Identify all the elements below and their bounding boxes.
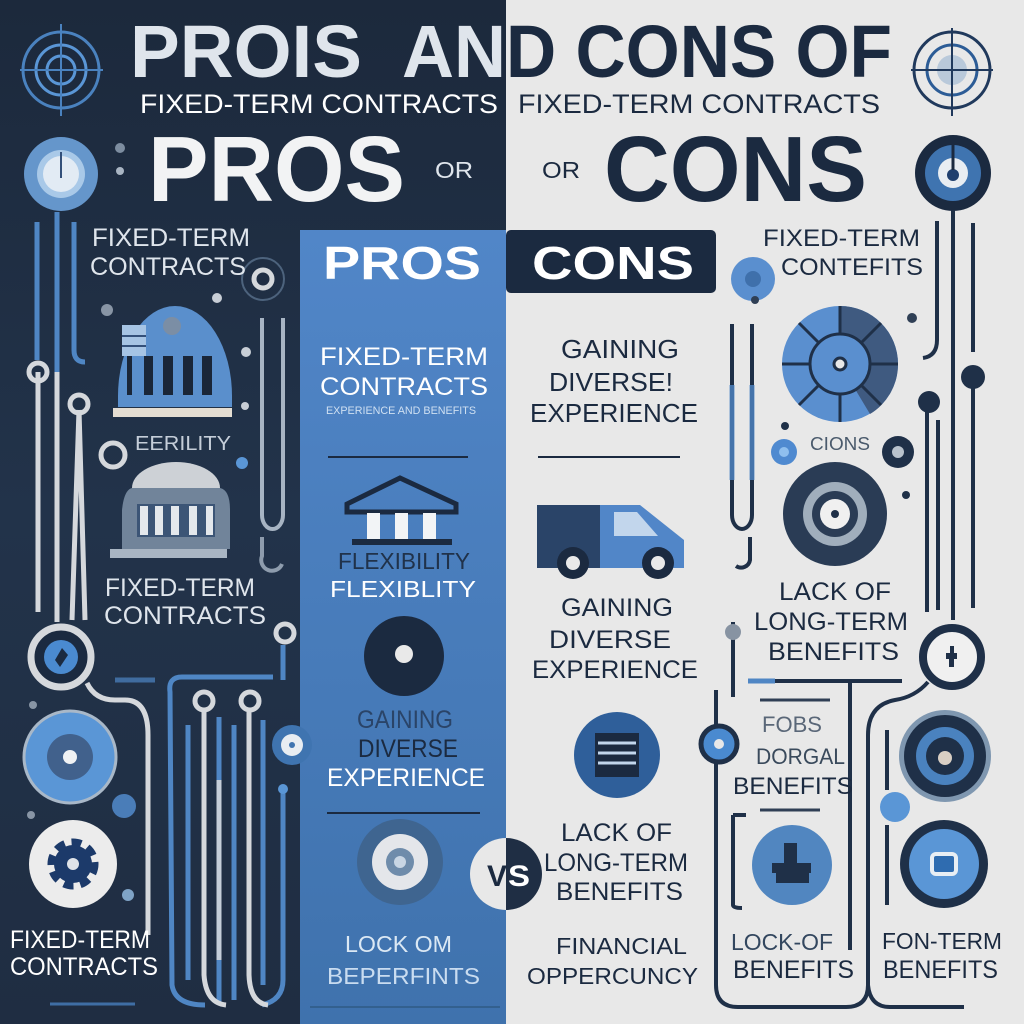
icon: right top circle	[915, 135, 991, 211]
text: gaining diverse experience two: EXPERIENCE	[532, 656, 698, 684]
text: cons: CIONS	[810, 434, 870, 454]
lower left circuit lines	[27, 645, 288, 1005]
text: gaining diverse experience cons: EXPERIENCE	[530, 398, 698, 428]
text: fixed-term contracts: FIXED-TERM	[92, 224, 250, 252]
text: gaining diverse experience: DIVERSE	[358, 735, 458, 763]
subtitle left: FIXED-TERM CONTRACTS	[140, 89, 498, 119]
text: fon-term benefits: FON-TERM	[882, 928, 1002, 954]
text: fixed-term contracts	[90, 224, 250, 281]
title: D CONS OF	[506, 10, 892, 93]
text: roles legal benefits: DORGAL	[756, 744, 845, 769]
banner: pros: PROS	[323, 237, 481, 289]
text: fixed-term contefits: CONTEFITS	[781, 254, 923, 281]
text: gaining diverse experience two: DIVERSE	[549, 626, 671, 654]
text: flexibility: EERILITY	[135, 433, 231, 455]
text: pros column heading: FIXED-TERM	[320, 343, 488, 371]
text: lack of long-term benefits two: LACK OF	[779, 578, 891, 606]
text: pros column heading	[320, 343, 488, 417]
text: lack of long-term benefits	[544, 819, 688, 906]
left connector lines	[29, 143, 294, 642]
heading: pros: PROS	[148, 117, 405, 221]
banner: cons: CONS	[532, 237, 694, 289]
icon: list circle	[574, 712, 660, 798]
text: lack of long-term benefits two	[754, 578, 908, 666]
text: fixed-term contracts three: CONTRACTS	[10, 953, 158, 981]
text: fixed-term contefits	[763, 225, 923, 281]
text: fixed-term contefits: FIXED-TERM	[763, 225, 920, 252]
title: PROIS	[130, 10, 362, 93]
title: AN	[402, 10, 506, 93]
text: lack of long-term benefits: BENEFITS	[556, 878, 683, 906]
text: roles legal benefits: FOBS	[762, 712, 822, 737]
text: financial opportunity: FINANCIAL	[556, 933, 687, 959]
icon: left top circle	[24, 137, 98, 211]
text: fixed-term contracts two: FIXED-TERM	[105, 574, 255, 602]
or right: OR	[542, 157, 580, 183]
text: gaining diverse experience cons	[530, 334, 698, 428]
text: fixed-term contracts three	[10, 926, 158, 981]
text: financial opportunity: OPPERCUNCY	[527, 963, 698, 989]
text: lock-of benefits: LOCK-OF	[731, 929, 833, 955]
icon: gear	[29, 820, 117, 908]
icon: lower right square circle	[900, 820, 988, 908]
text: fixed-term contracts two: CONTRACTS	[104, 602, 266, 630]
text: lack of long-term benefits: LONG-TERM	[544, 849, 688, 877]
text: lock benefits: LOCK OM	[345, 931, 452, 957]
icon: bank building	[113, 306, 232, 417]
divider left	[328, 456, 468, 458]
text: gaining diverse experience: GAINING	[357, 706, 453, 734]
subtitle right: FIXED-TERM CONTRACTS	[518, 89, 880, 119]
text: flexibility: FLEXIBILITY	[338, 548, 470, 574]
icon: right edge small circle	[272, 725, 312, 765]
text: gaining diverse experience	[327, 706, 485, 792]
icon: temple	[347, 478, 456, 545]
text: financial opportunity	[527, 933, 698, 989]
badge: vs	[470, 838, 542, 910]
text: lock benefits: BEPERFINTS	[327, 963, 480, 989]
text: fon-term benefits	[882, 928, 1002, 984]
text: gaining diverse experience: EXPERIENCE	[327, 764, 485, 792]
divider right	[538, 456, 680, 458]
text: lock benefits	[327, 931, 480, 989]
title	[130, 10, 892, 93]
text: gaining diverse experience two: GAINING	[561, 594, 673, 622]
text: roles legal benefits	[733, 712, 853, 800]
icon: lower left node	[31, 627, 91, 687]
text: roles legal benefits: BENEFITS	[733, 773, 853, 800]
text: fixed-term contracts: CONTRACTS	[90, 253, 246, 281]
panel: light right background	[506, 0, 1024, 1024]
icon: lower left circle	[24, 711, 116, 803]
icon: segmented wheel	[782, 306, 898, 422]
text: gaining diverse experience cons: GAINING	[561, 334, 679, 364]
text: fixed-term contracts three: FIXED-TERM	[10, 926, 150, 954]
text: gaining diverse experience two	[532, 594, 698, 684]
text: flexibility: FLEXIBLITY	[330, 576, 476, 602]
text: gaining diverse experience cons: DIVERSE!	[549, 367, 673, 397]
icon: blue cross circle	[752, 825, 832, 905]
text: lack of long-term benefits two: BENEFITS	[768, 638, 899, 666]
badge: vs: V	[487, 860, 507, 893]
icon: dark target	[783, 462, 887, 566]
divider lower left	[327, 812, 480, 814]
text: flexibility	[330, 548, 476, 602]
banner: cons	[506, 230, 716, 293]
panel: dark left background	[0, 0, 506, 1024]
icon: top left target	[20, 24, 103, 116]
lower right frame lines	[701, 622, 964, 1007]
text: lock-of benefits	[731, 929, 854, 984]
text: lack of long-term benefits two: LONG-TERM	[754, 608, 908, 636]
bottom faint line	[310, 1006, 500, 1008]
icon: top right target	[911, 28, 993, 116]
or left: OR	[435, 157, 473, 183]
icon: lower right ring	[899, 710, 991, 802]
text: pros column heading: EXPERIENCE AND BENEFITS	[326, 405, 476, 417]
icon: van	[537, 505, 684, 579]
icon: bank building two	[110, 462, 230, 558]
icon: dark circle	[364, 616, 444, 696]
panel: blue pros column	[300, 230, 506, 1024]
icon: right node	[923, 628, 981, 686]
icon: blue panel target	[357, 819, 443, 905]
heading: cons: CONS	[604, 117, 867, 221]
text: lock-of benefits: BENEFITS	[733, 956, 854, 984]
badge: vs: S	[508, 860, 530, 893]
text: lack of long-term benefits: LACK OF	[561, 819, 672, 847]
text: fixed-term contracts two	[104, 574, 266, 630]
text: fon-term benefits: BENEFITS	[883, 956, 998, 984]
text: pros column heading: CONTRACTS	[320, 373, 488, 401]
right connector lines	[731, 210, 985, 620]
